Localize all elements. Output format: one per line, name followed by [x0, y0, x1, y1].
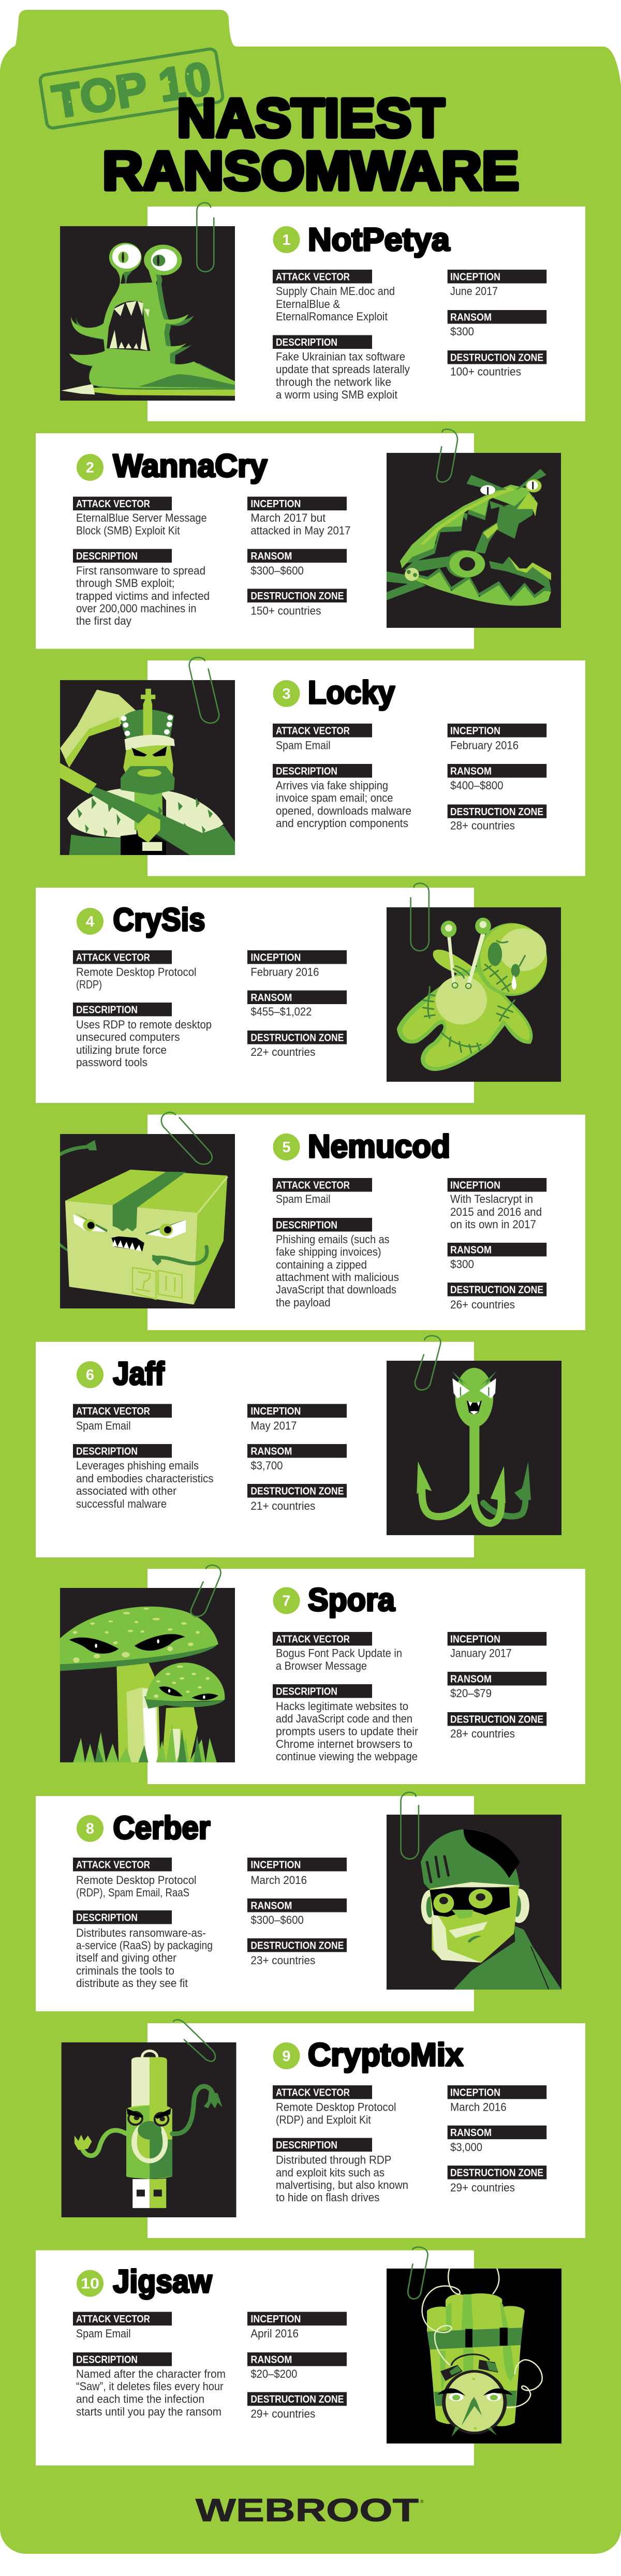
attack vector: [73, 950, 197, 991]
description: and embodies characteristics: [76, 1472, 213, 1485]
number badge: [77, 1361, 103, 1388]
attack vector: EternalBlue &: [276, 298, 340, 311]
inception: [247, 2312, 347, 2340]
description: [273, 764, 411, 830]
paperclip: [189, 657, 219, 723]
attack vector: (RDP) and Exploit Kit: [276, 2113, 371, 2126]
inception: INCEPTION: [450, 2087, 500, 2098]
description: and exploit kits such as: [276, 2166, 385, 2179]
ransom: RANSOM: [450, 766, 492, 777]
heading: Jaff: [113, 1356, 165, 1392]
attack vector: ATTACK VECTOR: [76, 1406, 150, 1417]
description: the first day: [76, 614, 131, 627]
number badge: 7: [282, 1593, 291, 1610]
description: DESCRIPTION: [276, 766, 337, 777]
description: “Saw”, it deletes files every hour: [76, 2380, 224, 2393]
destruction zone: DESTRUCTION ZONE: [450, 1285, 543, 1296]
destruction zone: [448, 1283, 546, 1311]
destruction zone: DESTRUCTION ZONE: [450, 1714, 543, 1726]
paperclip: [197, 203, 214, 272]
attack vector: [73, 497, 207, 537]
inception: [448, 270, 546, 298]
ransom: [247, 991, 347, 1018]
description: Leverages phishing emails: [76, 1459, 199, 1472]
heading: Spora: [308, 1582, 395, 1618]
description: DESCRIPTION: [76, 2354, 138, 2365]
ransom: $455–$1,022: [250, 1005, 312, 1018]
title: RANSOMWARE: [102, 141, 519, 201]
attack vector: ATTACK VECTOR: [76, 2314, 150, 2325]
destruction zone: 100+ countries: [450, 365, 521, 378]
ransom: [247, 2352, 347, 2380]
inception: February 2016: [450, 739, 519, 752]
attack vector: EternalBlue Server Message: [76, 511, 207, 524]
inception: February 2016: [250, 965, 319, 978]
description: [273, 335, 410, 401]
destruction zone: [247, 2392, 347, 2420]
illustration: bear trap: [387, 453, 561, 628]
ransom: [448, 1243, 546, 1271]
inception: [247, 497, 350, 537]
destruction zone: DESTRUCTION ZONE: [250, 1940, 344, 1951]
attack vector: Spam Email: [76, 2327, 131, 2340]
ransom: [247, 1898, 347, 1926]
illustration: evil mushrooms: [60, 1588, 235, 1762]
description: opened, downloads malware: [276, 804, 411, 817]
description: JavaScript that downloads: [276, 1283, 396, 1296]
paperclip: [437, 429, 457, 482]
heading: NotPetya: [308, 222, 450, 258]
description: continue viewing the webpage: [276, 1750, 418, 1763]
description: through SMB exploit;: [76, 577, 175, 590]
destruction zone: 29+ countries: [250, 2407, 315, 2420]
destruction zone: DESTRUCTION ZONE: [250, 1032, 344, 1043]
illustration: angry parcel: [60, 1134, 235, 1308]
ransom: [448, 310, 546, 338]
ransom: [448, 2126, 546, 2154]
ransom: [247, 549, 347, 577]
description: Phishing emails (such as: [276, 1233, 390, 1246]
destruction zone: [448, 1712, 546, 1740]
ransom: RANSOM: [450, 1674, 492, 1685]
description: and encryption components: [276, 817, 408, 830]
description: DESCRIPTION: [276, 1686, 337, 1698]
logo: Webroot: ®: [420, 2499, 424, 2504]
destruction zone: 29+ countries: [450, 2181, 515, 2194]
heading: WannaCry: [113, 448, 268, 484]
number badge: 8: [86, 1821, 94, 1837]
description: DESCRIPTION: [76, 1912, 138, 1923]
description: a-service (RaaS) by packaging: [76, 1939, 213, 1952]
panel: Spora: [60, 1565, 585, 1784]
heading: Nemucod: [308, 1129, 450, 1165]
attack vector: Supply Chain ME.doc and: [276, 285, 395, 298]
inception: 2015 and 2016 and: [450, 1205, 542, 1218]
description: the payload: [276, 1296, 331, 1309]
inception: April 2016: [250, 2327, 299, 2340]
attack vector: ATTACK VECTOR: [276, 2087, 350, 2098]
ransom: $400–$800: [450, 779, 503, 792]
description: distribute as they see fit: [76, 1977, 188, 1990]
number badge: [77, 908, 103, 935]
destruction zone: 28+ countries: [450, 1727, 515, 1740]
panel: Locky: [60, 657, 585, 876]
inception: June 2017: [450, 285, 498, 298]
inception: With Teslacrypt in: [450, 1193, 533, 1205]
attack vector: Spam Email: [76, 1419, 131, 1432]
description: itself and giving other: [76, 1951, 176, 1964]
attack vector: ATTACK VECTOR: [76, 1859, 150, 1871]
illustration: time bomb: [387, 2269, 561, 2443]
panel: NotPetya: [60, 203, 585, 421]
destruction zone: [448, 350, 546, 378]
description: over 200,000 machines in: [76, 602, 197, 615]
inception: [247, 950, 347, 978]
ransom: $300–$600: [250, 564, 304, 577]
ransom: $3,700: [250, 1459, 283, 1472]
description: DESCRIPTION: [276, 337, 337, 348]
attack vector: (RDP), Spam Email, RaaS: [76, 1886, 189, 1899]
number badge: 4: [86, 914, 94, 930]
description: Chrome internet browsers to: [276, 1738, 412, 1750]
inception: INCEPTION: [250, 1406, 301, 1417]
inception: INCEPTION: [450, 726, 500, 737]
description: through the network like: [276, 376, 391, 388]
destruction zone: DESTRUCTION ZONE: [250, 1485, 344, 1497]
panel: CrySis: [36, 884, 561, 1103]
title: [102, 88, 519, 201]
attack vector: [73, 2312, 172, 2340]
description: DESCRIPTION: [276, 2140, 337, 2151]
ransom: $3,000: [450, 2141, 482, 2154]
description: [73, 2352, 226, 2418]
attack vector: Remote Desktop Protocol: [76, 965, 197, 978]
description: criminals the tools to: [76, 1964, 174, 1977]
panel: Jaff: [36, 1336, 561, 1557]
description: a worm using SMB exploit: [276, 388, 397, 401]
ransom: [448, 764, 546, 792]
description: update that spreads laterally: [276, 363, 410, 376]
inception: March 2016: [450, 2101, 507, 2114]
number badge: 1: [282, 232, 291, 248]
number badge: [273, 1134, 300, 1160]
inception: [247, 1404, 347, 1432]
description: Uses RDP to remote desktop: [76, 1018, 212, 1031]
ransom: [448, 1672, 546, 1700]
description: associated with other: [76, 1484, 176, 1497]
inception: [448, 1632, 546, 1660]
description: trapped victims and infected: [76, 590, 210, 602]
destruction zone: DESTRUCTION ZONE: [450, 352, 543, 363]
inception: on its own in 2017: [450, 1218, 536, 1231]
number badge: [273, 226, 300, 253]
description: [73, 549, 210, 627]
inception: INCEPTION: [450, 1633, 500, 1645]
inception: INCEPTION: [250, 498, 301, 510]
heading: CrySis: [113, 902, 205, 938]
description: [273, 1218, 399, 1309]
destruction zone: [247, 1484, 347, 1512]
panel: Nemucod: [59, 1112, 585, 1330]
description: to hide on flash drives: [276, 2191, 380, 2204]
panel: Cerber: [36, 1792, 561, 2011]
attack vector: [273, 1178, 372, 1205]
destruction zone: 21+ countries: [250, 1499, 315, 1512]
number badge: 5: [282, 1139, 291, 1156]
paperclip: [191, 1565, 221, 1616]
number badge: 6: [86, 1367, 94, 1383]
paperclip: [173, 2020, 215, 2062]
paperclip: [411, 884, 429, 951]
description: DESCRIPTION: [76, 551, 138, 562]
heading: Jigsaw: [113, 2264, 212, 2300]
ransom: RANSOM: [450, 1244, 492, 1256]
destruction zone: DESTRUCTION ZONE: [250, 591, 344, 602]
illustration: usb drive monster: [61, 2042, 236, 2217]
number badge: [77, 454, 103, 481]
description: First ransomware to spread: [76, 564, 205, 577]
destruction zone: DESTRUCTION ZONE: [250, 2394, 344, 2405]
destruction zone: [247, 1938, 347, 1967]
inception: March 2016: [250, 1874, 307, 1887]
description: DESCRIPTION: [76, 1004, 138, 1015]
attack vector: Remote Desktop Protocol: [276, 2101, 396, 2114]
number badge: 9: [282, 2048, 291, 2065]
description: [73, 1910, 213, 1990]
paperclip: [161, 1112, 212, 1164]
destruction zone: [247, 1031, 347, 1058]
inception: [448, 2085, 546, 2114]
description: Hacks legitimate websites to: [276, 1700, 408, 1713]
description: [273, 1684, 418, 1763]
description: prompts users to update their: [276, 1725, 418, 1738]
attack vector: ATTACK VECTOR: [276, 1180, 350, 1191]
number badge: 2: [86, 460, 94, 476]
stamp: top 10: TOP 10: [49, 53, 215, 128]
ransom: RANSOM: [250, 1901, 292, 1912]
number badge: [273, 1587, 300, 1614]
number badge: 10: [81, 2276, 99, 2292]
destruction zone: [448, 804, 546, 832]
attack vector: [73, 1404, 172, 1432]
description: DESCRIPTION: [276, 1219, 337, 1231]
inception: [247, 1858, 347, 1887]
inception: INCEPTION: [250, 952, 301, 964]
attack vector: [73, 1858, 197, 1899]
description: add JavaScript code and then: [276, 1712, 412, 1725]
description: starts until you pay the ransom: [76, 2405, 221, 2418]
heading: Cerber: [113, 1810, 210, 1846]
ransom: RANSOM: [450, 312, 492, 323]
attack vector: ATTACK VECTOR: [76, 952, 150, 964]
description: [73, 1003, 212, 1069]
description: [273, 2138, 408, 2204]
destruction zone: 28+ countries: [450, 819, 515, 832]
description: [73, 1444, 213, 1510]
ransom: RANSOM: [250, 1446, 292, 1458]
description: Distributes ransomware-as-: [76, 1926, 206, 1939]
number badge: [77, 2270, 103, 2297]
destruction zone: 22+ countries: [250, 1046, 315, 1058]
attack vector: [273, 724, 372, 752]
description: attachment with malicious: [276, 1271, 399, 1284]
attack vector: [273, 1632, 402, 1672]
inception: INCEPTION: [450, 271, 500, 283]
ransom: $300: [450, 1258, 474, 1271]
attack vector: ATTACK VECTOR: [276, 726, 350, 737]
inception: INCEPTION: [250, 2314, 301, 2325]
inception: January 2017: [450, 1647, 512, 1660]
attack vector: [273, 270, 395, 323]
illustration: fish hook monster: [387, 1361, 561, 1535]
inception: [448, 1178, 546, 1231]
attack vector: Bogus Font Pack Update in: [276, 1647, 402, 1660]
description: DESCRIPTION: [76, 1446, 138, 1458]
title: NASTIEST: [177, 88, 445, 149]
description: Fake Ukrainian tax software: [276, 350, 405, 363]
attack vector: Remote Desktop Protocol: [76, 1874, 197, 1887]
inception: [448, 724, 546, 752]
attack vector: Spam Email: [276, 739, 331, 752]
paperclip: [408, 2247, 428, 2299]
attack vector: ATTACK VECTOR: [276, 1633, 350, 1645]
attack vector: Spam Email: [276, 1193, 331, 1205]
heading: Locky: [308, 675, 395, 711]
ransom: RANSOM: [250, 992, 292, 1004]
description: Arrives via fake shipping: [276, 779, 388, 792]
attack vector: ATTACK VECTOR: [76, 498, 150, 510]
number badge: [273, 2042, 300, 2069]
destruction zone: 23+ countries: [250, 1954, 315, 1967]
attack vector: EternalRomance Exploit: [276, 310, 388, 323]
ransom: $20–$79: [450, 1687, 492, 1700]
description: Distributed through RDP: [276, 2154, 391, 2167]
panel: CryptoMix: [62, 2020, 585, 2238]
ransom: RANSOM: [250, 551, 292, 562]
attack vector: a Browser Message: [276, 1659, 367, 1672]
description: Named after the character from: [76, 2367, 226, 2380]
panel: Jigsaw: [36, 2247, 561, 2465]
description: fake shipping invoices): [276, 1245, 381, 1258]
ransom: $20–$200: [250, 2367, 297, 2380]
destruction zone: DESTRUCTION ZONE: [450, 806, 543, 818]
destruction zone: 150+ countries: [250, 605, 321, 617]
number badge: [77, 1815, 103, 1842]
number badge: [273, 680, 300, 707]
description: password tools: [76, 1056, 147, 1069]
panel: WannaCry: [36, 429, 561, 649]
description: malvertising, but also known: [276, 2178, 408, 2191]
description: invoice spam email; once: [276, 791, 393, 804]
heading: CryptoMix: [308, 2037, 464, 2073]
logo: Webroot: WEBROOT: [196, 2493, 419, 2528]
description: and each time the infection: [76, 2392, 204, 2406]
illustration: slime monster: [60, 226, 235, 401]
inception: March 2017 but: [250, 511, 326, 524]
attack vector: [273, 2085, 396, 2126]
description: containing a zipped: [276, 1258, 367, 1271]
illustration: king with axe: [60, 680, 235, 855]
description: utilizing brute force: [76, 1043, 167, 1056]
destruction zone: 26+ countries: [450, 1298, 515, 1311]
destruction zone: DESTRUCTION ZONE: [450, 2168, 543, 2179]
attack vector: (RDP): [76, 978, 102, 991]
description: unsecured computers: [76, 1031, 180, 1043]
number badge: 3: [282, 686, 291, 702]
ransom: RANSOM: [450, 2127, 492, 2139]
attack vector: ATTACK VECTOR: [276, 271, 350, 283]
description: successful malware: [76, 1497, 167, 1510]
ransom: RANSOM: [250, 2354, 292, 2365]
destruction zone: [247, 589, 347, 617]
attack vector: Block (SMB) Exploit Kit: [76, 524, 180, 537]
ransom: $300–$600: [250, 1913, 304, 1926]
ransom: [247, 1444, 347, 1472]
inception: May 2017: [250, 1419, 297, 1432]
ransom: $300: [450, 325, 474, 338]
illustration: voodoo doll: [387, 907, 561, 1082]
paperclip: [401, 1792, 419, 1859]
inception: attacked in May 2017: [250, 524, 350, 537]
destruction zone: [448, 2166, 546, 2194]
illustration: masked hacker: [387, 1815, 561, 1990]
inception: INCEPTION: [450, 1180, 500, 1191]
paperclip: [415, 1336, 440, 1390]
inception: INCEPTION: [250, 1859, 301, 1871]
